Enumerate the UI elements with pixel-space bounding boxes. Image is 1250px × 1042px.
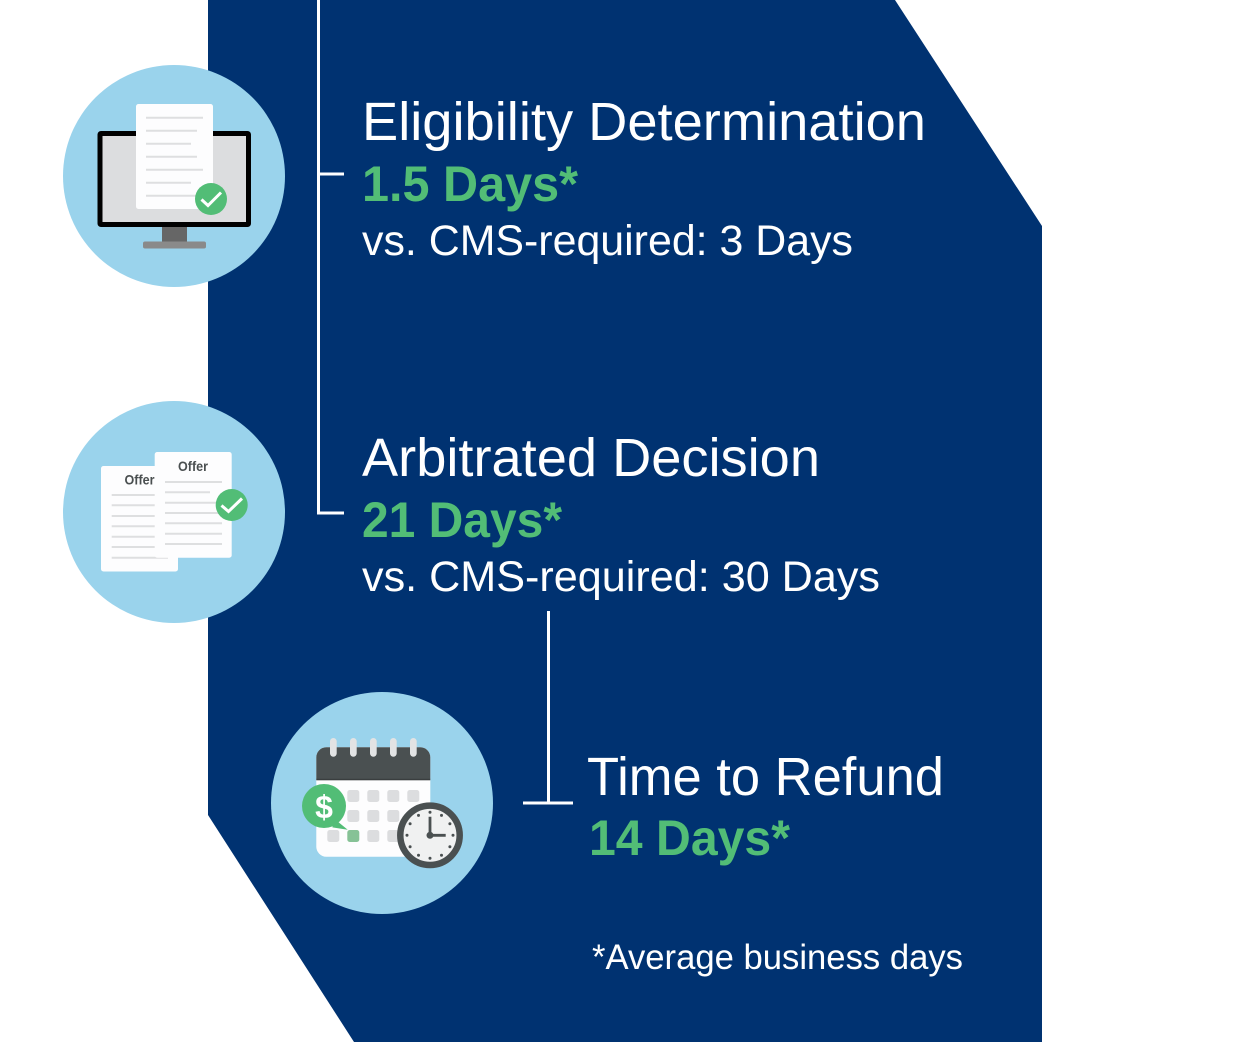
text block: arbitrated decision <box>362 428 880 601</box>
timeline connector: lower <box>523 611 573 803</box>
text block: arbitrated decision: 21 Days* <box>362 492 563 548</box>
navy background panel <box>208 0 1042 1042</box>
footnote: *Average business days <box>592 938 963 977</box>
timeline connector: upper <box>318 0 344 513</box>
text block: time to refund: 14 Days* <box>589 810 791 866</box>
text block: time to refund: Time to Refund <box>587 747 944 807</box>
text block: eligibility determination: 1.5 Days* <box>362 156 579 212</box>
icon: calendar with dollar bubble and clock <box>271 692 493 914</box>
icon: monitor with document and check <box>63 65 285 287</box>
icon: offer documents with check <box>63 401 285 623</box>
text block: time to refund <box>587 747 944 866</box>
text block: arbitrated decision: Arbitrated Decision <box>362 428 820 488</box>
text block: arbitrated decision: vs. CMS-required: 30 Days <box>362 553 880 601</box>
text block: eligibility determination: Eligibility Determination <box>362 92 926 152</box>
text block: eligibility determination <box>362 92 926 265</box>
icon: calendar with dollar bubble and clock: $ <box>315 789 333 825</box>
text block: eligibility determination: vs. CMS-required: 3 Days <box>362 217 853 265</box>
icon: offer documents with check: Offer <box>178 459 209 474</box>
icon: offer documents with check: Offer <box>124 472 155 488</box>
